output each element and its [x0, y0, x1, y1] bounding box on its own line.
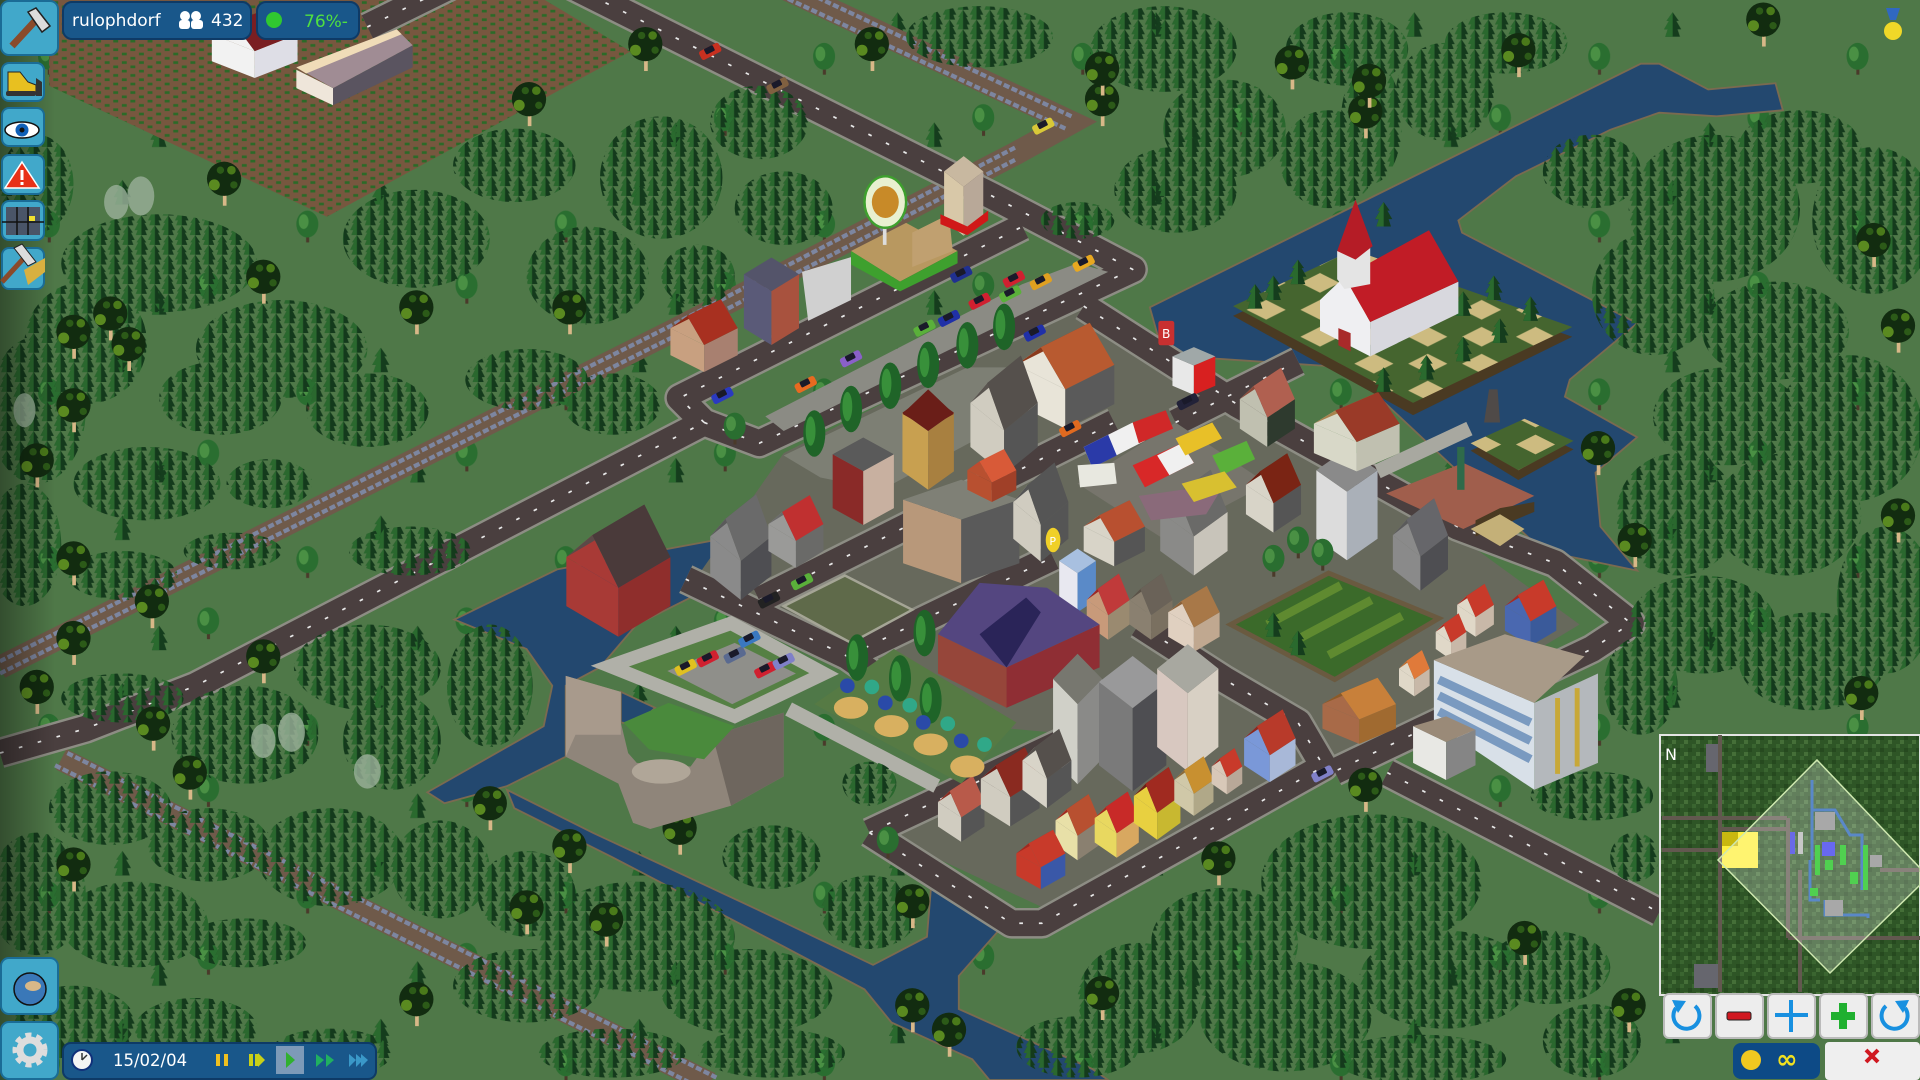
minimap background: [1660, 735, 1920, 995]
high-rise window bands: [1439, 680, 1531, 759]
zoom in: [1831, 1003, 1855, 1029]
smiley: [266, 12, 282, 28]
pause: [216, 1054, 228, 1066]
central plaza: [784, 576, 912, 643]
canal by garden: [1308, 612, 1458, 704]
farm buildings: [212, 5, 413, 105]
car park bays: [667, 643, 796, 704]
minimap town: [1790, 780, 1882, 918]
railway north: [0, 0, 1071, 667]
bulldozer button: [2, 63, 44, 101]
castle pool: [621, 692, 655, 725]
parking sign: P: [1049, 535, 1056, 548]
road kerb: [0, 0, 1659, 923]
hall main roof: [938, 583, 1100, 667]
red awning: [940, 211, 988, 235]
burger restaurant: [851, 176, 958, 291]
town ground: [698, 306, 1580, 912]
minimap roads: [1662, 735, 1920, 992]
brick office: [744, 257, 799, 345]
castle yard: [623, 703, 735, 759]
money pill: [1733, 1043, 1820, 1079]
high-rise roof: [1434, 634, 1585, 703]
fastest: [349, 1054, 368, 1067]
farmhouse: [212, 5, 298, 78]
car park ring road: [610, 623, 824, 716]
bus stop sign: [1158, 321, 1174, 345]
church tower: [1337, 247, 1370, 289]
stall bases: [834, 697, 984, 778]
population: 432: [211, 11, 243, 31]
white road by plaza: [1378, 429, 1469, 471]
plaza with statue: [1386, 447, 1534, 536]
church door: [1338, 328, 1351, 351]
church spire: [1337, 200, 1373, 260]
parking strip in loop: [765, 263, 1108, 431]
lower car park: [610, 623, 824, 716]
water bodies: [427, 64, 1783, 1080]
small island with trees: [1471, 419, 1573, 480]
church side wall: [1370, 282, 1458, 356]
castle lit stone: [566, 676, 621, 757]
centre: [1775, 1000, 1808, 1032]
umbrellas: [840, 678, 992, 752]
high-rise front wall: [1434, 660, 1534, 790]
coin: [1741, 1050, 1761, 1070]
south river: [507, 790, 1108, 1080]
church roof: [1345, 230, 1458, 322]
railway south: [61, 759, 710, 1080]
high-rise side wall: [1534, 673, 1598, 790]
castle round tower: [632, 759, 691, 784]
road markings: [0, 0, 1659, 923]
shop with red roof: [670, 299, 738, 372]
stall lawn: [814, 649, 1016, 784]
demolish hammer button: [2, 244, 45, 289]
garden beds: [1267, 585, 1402, 655]
north label: N: [1665, 745, 1677, 764]
date: 15/02/04: [113, 1051, 187, 1070]
hammer button: [1, 1, 58, 55]
layers button: [2, 201, 44, 240]
market square: [1078, 422, 1267, 539]
stalls south of hall: [834, 678, 992, 778]
island trees: [1247, 202, 1539, 392]
canal behind south row: [1000, 716, 1273, 860]
church island: [1233, 200, 1572, 415]
light road to castle: [789, 709, 937, 786]
zoom out: [1727, 1012, 1751, 1020]
island base: [1233, 260, 1572, 415]
small sand island: [1471, 514, 1525, 546]
north-east river and church moat: [1150, 64, 1783, 571]
barn: [296, 29, 413, 105]
road network: [0, 0, 1659, 923]
high-rise: [1413, 634, 1598, 790]
step: [249, 1053, 265, 1067]
clock: [72, 1050, 92, 1070]
church front gable: [1320, 277, 1370, 356]
central town buildings: [566, 323, 1556, 791]
garden lawn: [1231, 573, 1439, 680]
annex: [1413, 716, 1476, 780]
close button: [1825, 1042, 1920, 1080]
white trees: [13, 176, 381, 789]
town name pill: [63, 2, 251, 39]
bus stop sign: B: [1162, 327, 1170, 341]
minimap grey areas: [1694, 744, 1718, 988]
left edge shading: [0, 0, 55, 1080]
south row houses: [938, 729, 1242, 889]
rotate right: [1882, 1000, 1909, 1029]
hall roof valley: [980, 598, 1041, 667]
purple-roofed hall: [938, 583, 1100, 708]
island surface with sand: [1233, 250, 1572, 403]
minimap buttons: [1664, 994, 1919, 1038]
population icon: [179, 11, 203, 29]
railway tracks: [0, 0, 1071, 1080]
fast forward: [316, 1054, 334, 1067]
top left toolbar: [1, 1, 58, 289]
church: [1320, 200, 1458, 356]
date and speed bar: [63, 1043, 376, 1079]
minimap panel: [1660, 735, 1920, 1038]
rotate left: [1672, 1000, 1699, 1029]
castle base: [566, 676, 784, 829]
north row buildings: [670, 156, 988, 372]
market stalls: [1078, 410, 1255, 520]
statue on column: [1484, 389, 1500, 422]
garden: [1231, 573, 1439, 680]
parking sign: [1046, 528, 1060, 552]
tan tower: [944, 156, 983, 236]
railways: [0, 0, 1071, 1080]
infinity: ∞: [1776, 1045, 1798, 1075]
medal: [1884, 8, 1902, 40]
globe button: [1, 958, 58, 1014]
road surface: [0, 0, 1659, 923]
yellow stripes: [1558, 688, 1577, 774]
eye button: [2, 108, 44, 146]
settings button: [1, 1022, 58, 1079]
castle ruins: [566, 676, 784, 829]
cars: [674, 42, 1335, 783]
town name: rulophdorf: [72, 11, 162, 31]
minimap yellow marker: [1722, 832, 1758, 868]
farm field: [49, 0, 631, 217]
selected play: [276, 1046, 304, 1074]
minimap viewport: [1718, 760, 1920, 973]
approval pill: [257, 2, 359, 39]
town trees: [724, 304, 1333, 858]
castle ruined wall: [713, 713, 784, 806]
hall right wall: [1007, 624, 1100, 708]
square paving: [784, 367, 1065, 490]
warning button: [2, 155, 44, 194]
white wall: [802, 257, 851, 321]
west pond and channel: [427, 484, 833, 803]
hall left wall: [938, 634, 1007, 708]
approval value: 76%-: [304, 12, 348, 32]
